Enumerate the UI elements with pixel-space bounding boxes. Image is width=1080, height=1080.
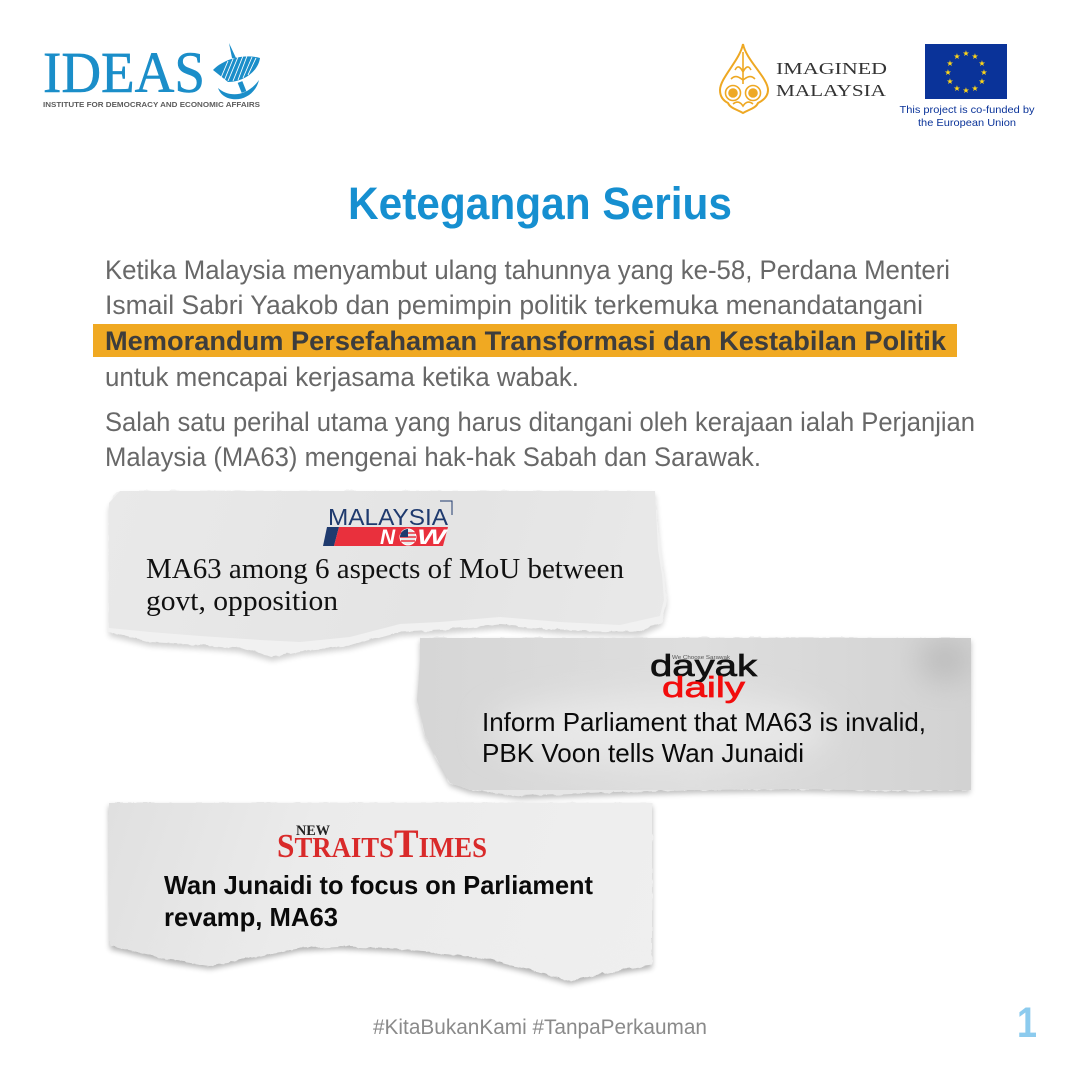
text block: introduction: Ismail Sabri Yaakob dan pemimpin politik terkemuka menandatangani — [105, 290, 923, 320]
logo: EU flag: ★ — [971, 52, 979, 61]
headline: Inform Parliament that MA63 is invalid, — [482, 707, 926, 737]
logo: Malaysia Now: W — [417, 526, 449, 549]
EU co-funding note: This project is co-funded by — [900, 104, 1035, 116]
logo: Imagined Malaysia — [720, 44, 887, 113]
IDEAS wordmark: IDEAS — [43, 40, 205, 105]
icon: gold wayang kulit — [720, 44, 768, 113]
panel: Dayak Daily clipping: PBK Voon tells Wan Junaidi — [482, 738, 804, 768]
title: Ketegangan Serius — [348, 178, 732, 229]
logo: EU flag: ★ — [978, 77, 986, 86]
headline: Wan Junaidi to focus on Parliament — [164, 870, 593, 900]
panel: Malaysia Now clipping — [109, 491, 667, 661]
icon: IDEAS bird — [213, 43, 260, 99]
logo: Dayak Daily: daily — [662, 672, 746, 704]
logo: EU flag: ★ — [946, 77, 954, 86]
text block: introduction: untuk mencapai kerjasama ketika wabak. — [105, 362, 579, 392]
panel: Malaysia Now clipping: govt, opposition — [146, 585, 339, 617]
panel: New Straits Times clipping: revamp, MA63 — [164, 902, 338, 932]
logo: Dayak Daily — [650, 648, 758, 704]
logo: Malaysia Now — [323, 501, 452, 549]
text block: MA63 — [105, 407, 975, 472]
logo: EU flag: ★ — [971, 84, 979, 93]
logo: EU flag: the European Union — [918, 117, 1016, 129]
logo: EU flag: ★ — [944, 68, 952, 77]
text block: introduction — [93, 255, 957, 392]
IDEAS full name: INSTITUTE FOR DEMOCRACY AND ECONOMIC AFFAIRS — [43, 100, 260, 109]
logo: Dayak Daily: We Choose Sarawak — [672, 655, 731, 661]
hashtags footer: #KitaBukanKami #TanpaPerkauman — [373, 1016, 707, 1039]
logo: EU flag: ★ — [978, 59, 986, 68]
text block: MA63: Malaysia (MA63) mengenai hak-hak Sabah dan Sarawak. — [105, 442, 761, 472]
logo: Dayak Daily: dayak — [650, 648, 758, 683]
highlight: memorandum: Memorandum Persefahaman Transformasi dan Kestabilan Politik — [105, 326, 947, 356]
logo: EU flag: ★ — [962, 86, 970, 95]
logo: EU flag: ★ — [953, 84, 961, 93]
panel: Dayak Daily clipping — [410, 638, 975, 799]
headline: MA63 among 6 aspects of MoU between — [146, 553, 624, 585]
logo: Malaysia Now: MALAYSIA — [328, 504, 449, 530]
logo: EU flag: ★ — [946, 59, 954, 68]
logo: EU flag: ★ — [962, 49, 970, 58]
text block: MA63: Salah satu perihal utama yang harus ditangani oleh kerajaan ialah Perjanjian — [105, 407, 975, 437]
page number: 1 — [1017, 999, 1037, 1047]
Imagined Malaysia wordmark: IMAGINED — [776, 59, 887, 78]
logo: New Straits Times: STRAITSTIMES — [277, 821, 487, 866]
logo: New Straits Times: NEW — [296, 823, 330, 839]
logo: Malaysia Now: N — [380, 526, 396, 549]
logo: Imagined Malaysia: MALAYSIA — [776, 81, 887, 100]
text block: introduction: Ketika Malaysia menyambut ulang tahunnya yang ke-58, Perdana Menteri — [105, 255, 950, 285]
logo: IDEAS — [43, 40, 260, 109]
logo: EU flag: ★ — [953, 52, 961, 61]
panel: New Straits Times clipping — [109, 803, 652, 984]
logo: EU flag: ★ — [980, 68, 988, 77]
logo: EU flag — [900, 44, 1035, 129]
